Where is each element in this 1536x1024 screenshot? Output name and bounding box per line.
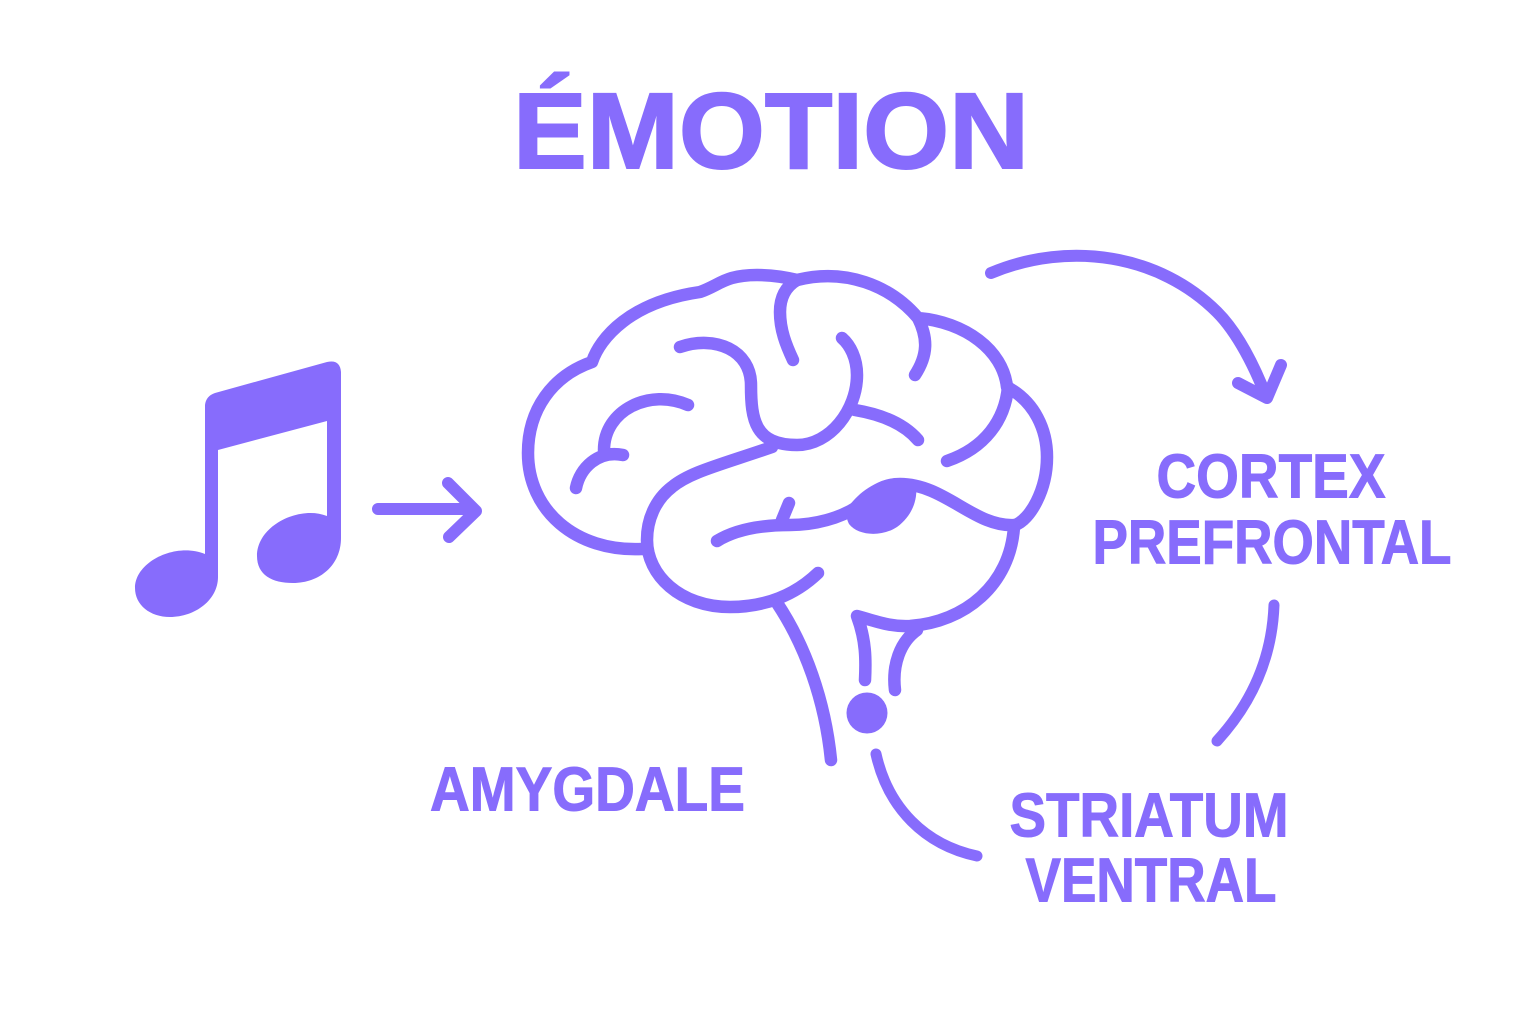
label line: prefrontal: PREFRONTAL	[1092, 508, 1452, 578]
left fold upper	[604, 399, 688, 450]
amygdala spot	[846, 478, 916, 534]
striatum dot	[846, 692, 888, 734]
arrow: music to brain	[378, 483, 476, 537]
label: amygdale: AMYGDALE	[430, 756, 745, 824]
lower sulcus	[717, 484, 1015, 541]
lower right contour	[857, 527, 1014, 680]
connector: cortex to striatum	[1217, 605, 1274, 741]
brain stem right	[894, 630, 917, 690]
label line: striatum: STRIATUM	[1010, 782, 1288, 850]
label: striatum ventral	[1010, 782, 1288, 916]
upper fold left	[780, 280, 797, 360]
brain inner lobe	[647, 447, 818, 607]
brain stem left	[777, 603, 831, 760]
right fold	[855, 410, 918, 440]
label: cortex prefrontal	[1092, 442, 1452, 578]
connector: dot to striatum	[876, 754, 977, 856]
arrow: to cortex	[991, 256, 1281, 398]
icon: music note	[135, 361, 341, 617]
label line: cortex: CORTEX	[1156, 442, 1386, 512]
sulcus tick	[782, 503, 789, 520]
left fold lower	[576, 454, 623, 488]
brain outer contour	[528, 275, 1047, 549]
icon: brain	[528, 275, 1047, 760]
label line: ventral: VENTRAL	[1026, 846, 1276, 916]
central fold	[680, 338, 857, 445]
far right fold	[947, 387, 1008, 461]
upper fold right	[915, 318, 925, 375]
title: ÉMOTION	[513, 70, 1029, 191]
